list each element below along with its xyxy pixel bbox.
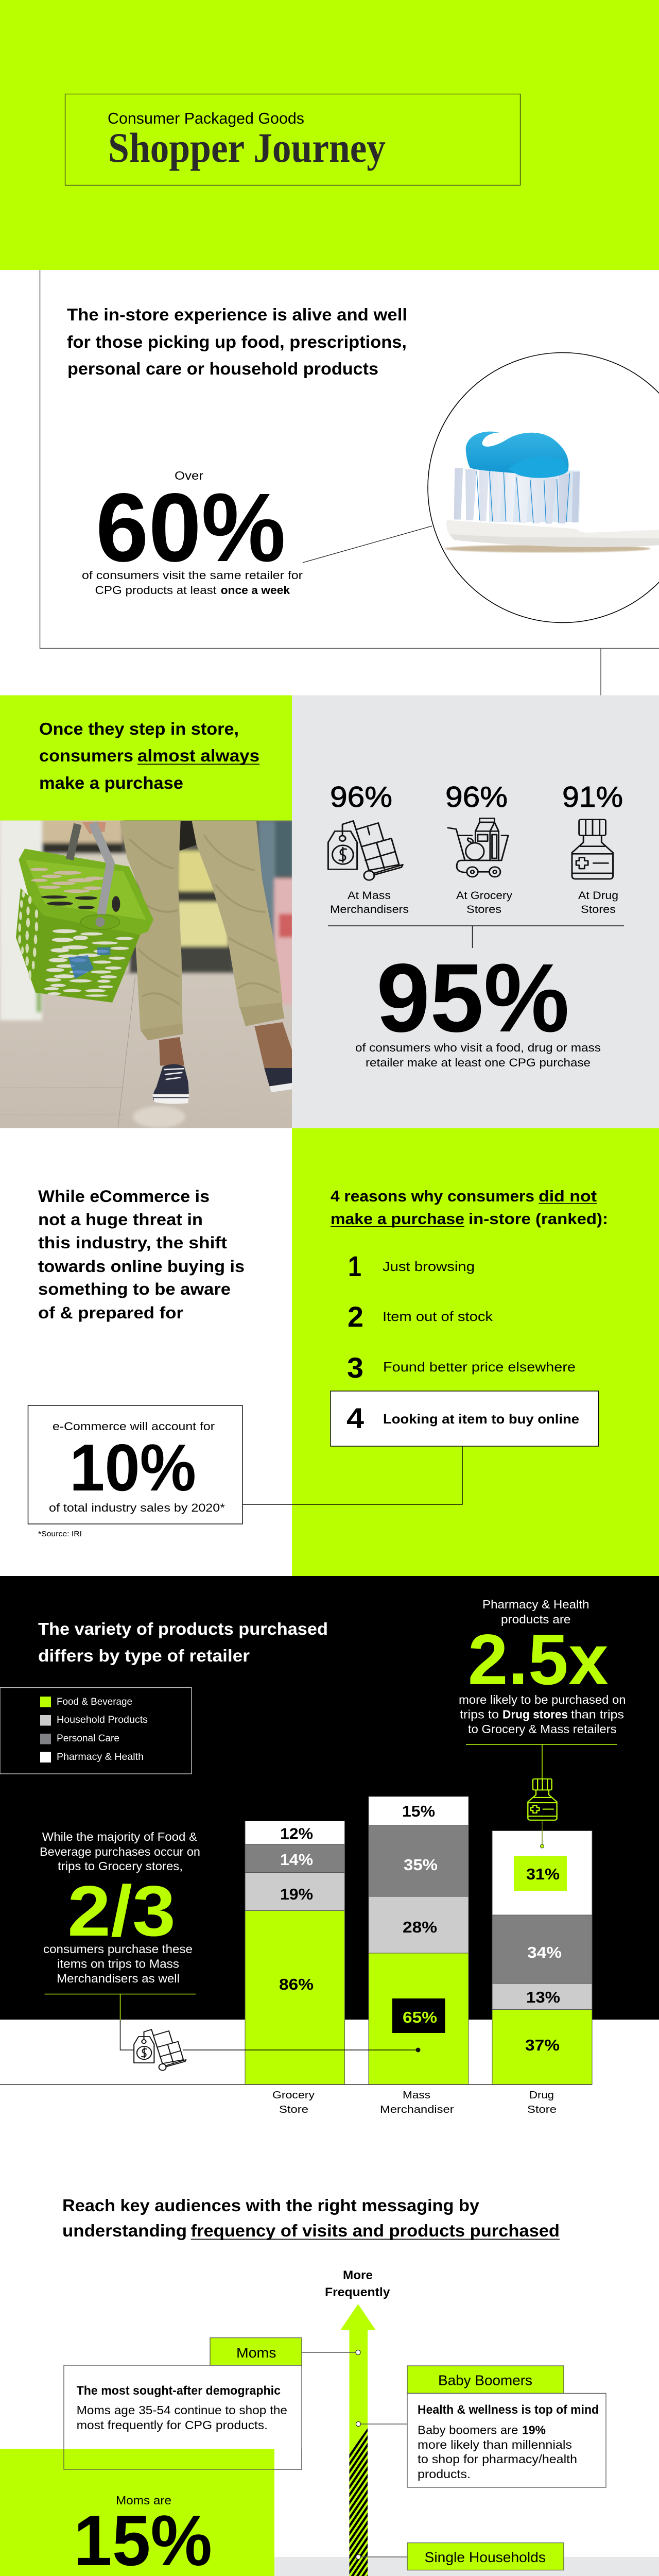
bar: mass merchandiser: [369, 1797, 469, 2084]
bar chart: purchases by retailer: [0, 1797, 592, 2115]
reason 4 highlighted: [331, 1391, 598, 1446]
axis labels: Store: [527, 2104, 557, 2115]
stat: two thirds: items on trips to Mass: [57, 1957, 179, 1970]
callout: 10 percent: e-Commerce will account for: [53, 1420, 215, 1433]
stat: mass merchandisers: Merchandisers: [330, 904, 409, 916]
axis labels: Grocery: [272, 2089, 315, 2101]
panel: title banner: [0, 0, 659, 270]
stat: mass merchandisers: [328, 781, 409, 916]
heading: variety of products: differs by type of retailer: [38, 1646, 250, 1665]
tag: baby boomers: Baby Boomers: [438, 2372, 532, 2388]
heading: in-store experience: personal care or household products: [67, 359, 378, 378]
reason 4 highlighted: 4: [346, 1402, 364, 1434]
arrow: frequency axis: [340, 2304, 376, 2576]
heading: ecommerce shift: not a huge threat in: [38, 1210, 203, 1229]
bar: grocery store: [245, 1821, 345, 2084]
stat: 2.5x: than trips: [571, 1707, 624, 1721]
stat: drug stores: [562, 781, 623, 916]
heading: four reasons: [331, 1187, 608, 1228]
panel: baby boomers description: Baby boomers are: [418, 2424, 518, 2437]
legend: Food & Beverage: [57, 1696, 132, 1707]
stat: 95 percent: retailer make at least one CPG purchase: [366, 1056, 591, 1069]
heading: ecommerce shift: towards online buying is: [38, 1257, 245, 1276]
tag: moms: [210, 2338, 360, 2365]
reason 2: Item out of stock: [383, 1309, 493, 1324]
ankles and shoes: [159, 1037, 184, 1065]
panel: basket photo heading: almost always: [137, 746, 259, 765]
panel: in-store experience: [40, 270, 659, 696]
stat: 2.5x: Drug stores: [502, 1707, 568, 1721]
panel: moms description: most frequently for CPG products.: [77, 2418, 268, 2432]
heading: in-store experience: The in-store experience is alive and well: [67, 305, 407, 324]
panel: baby boomers description: Health & wellness is top of mind: [418, 2403, 599, 2417]
axis label: more frequently: More: [343, 2268, 373, 2282]
reason 1: [348, 1250, 475, 1282]
drug values: [514, 1856, 567, 2054]
photo: shopper with basket: [0, 819, 293, 1128]
stat: grocery stores: 96%: [445, 781, 508, 814]
grocery values: 86%: [279, 1975, 314, 1993]
stat: mass merchandisers: 96%: [330, 781, 392, 814]
panel: baby boomers description: [407, 2393, 606, 2487]
panel: basket photo heading: Once they step in store,: [39, 719, 239, 738]
title box: Consumer Packaged Goods: [108, 109, 304, 127]
reason 3: 3: [347, 1351, 363, 1384]
basket body: [16, 888, 141, 1003]
panel: moms description: The most sought-after demographic: [77, 2384, 281, 2398]
heading: variety of products: The variety of products purchased: [38, 1619, 328, 1638]
stat: 95 percent: 95%: [376, 944, 569, 1053]
reason 3: Found better price elsewhere: [383, 1359, 576, 1375]
stat: 2.5x: [459, 1598, 626, 1736]
heading: reach key audiences: frequency of visits and products purchased: [191, 2221, 560, 2240]
legend: Pharmacy & Health: [57, 1751, 144, 1762]
heading: four reasons: make a purchase: [331, 1210, 464, 1228]
panel: moms 15 percent stat: Moms are: [116, 2494, 171, 2507]
panel: basket photo heading: [0, 696, 292, 820]
title box: [65, 94, 520, 185]
drug values: 34%: [527, 1943, 562, 1961]
reason 2: 2: [348, 1300, 363, 1333]
tag: moms: Moms: [236, 2345, 276, 2361]
stat: 2.5x: trips to: [460, 1707, 499, 1721]
title box: Shopper Journey: [108, 124, 386, 171]
reason 4 highlighted: Looking at item to buy online: [383, 1411, 579, 1427]
icon: grocery cart: [448, 818, 508, 877]
connector: reason 4 to stat: [242, 1446, 462, 1504]
heading: ecommerce shift: While eCommerce is: [38, 1187, 210, 1206]
grocery values: 12%: [280, 1825, 313, 1842]
axis labels: Store: [279, 2104, 308, 2115]
heading: ecommerce shift: something to be aware: [38, 1280, 231, 1298]
legend: Household Products: [57, 1714, 148, 1725]
stat: drug stores: 91%: [562, 781, 623, 814]
stat: 95 percent: [355, 944, 601, 1069]
icon: toothbrush in circle: [428, 352, 659, 622]
stat: 2.5x: Pharmacy & Health: [482, 1598, 589, 1611]
icon: small price tag and trolley: [134, 2029, 186, 2071]
heading: four reasons: in-store (ranked):: [469, 1210, 608, 1228]
stat: two thirds: Merchandisers as well: [57, 1972, 180, 1985]
drug values: 31%: [526, 1865, 560, 1883]
tag: single households: [356, 2543, 564, 2570]
mass values: 28%: [403, 1918, 437, 1936]
stat: 2.5x: products are: [501, 1613, 570, 1626]
stat: two thirds: Beverage purchases occur on: [40, 1845, 200, 1858]
axis labels: Merchandiser: [380, 2104, 454, 2115]
stat: grocery stores: [445, 781, 513, 916]
stat: 2.5x: 2.5x: [468, 1620, 609, 1700]
heading: ecommerce shift: this industry, the shift: [38, 1233, 227, 1252]
heading: ecommerce shift: [38, 1187, 245, 1322]
panel: purchase rates: [292, 696, 659, 1128]
panel: moms 15 percent stat: [0, 2449, 302, 2576]
tag: single households: Single Households: [424, 2549, 546, 2565]
panel: moms description: Moms age 35-54 continue to shop the: [77, 2403, 287, 2417]
connector: two thirds to mass bar: [120, 2020, 420, 2053]
panel: products by retailer: [0, 1576, 659, 2020]
stat: grocery stores: At Grocery: [456, 890, 513, 902]
tag: baby boomers: [356, 2366, 606, 2487]
mass values: [392, 1802, 445, 2033]
stat: 60 percent: of consumers visit the same retailer for: [82, 569, 303, 582]
callout: 10 percent: [28, 1405, 242, 1524]
axis label: more frequently: [325, 2268, 390, 2299]
stat: grocery stores: Stores: [466, 904, 501, 916]
panel: basket photo heading: consumers: [39, 746, 133, 765]
icon: small green bottle: [528, 1779, 557, 1848]
stat: mass merchandisers: At Mass: [348, 890, 391, 902]
reason 1: Just browsing: [383, 1259, 475, 1274]
callout: 10 percent: 10%: [70, 1431, 196, 1505]
stat: 60 percent: CPG products at least: [95, 584, 216, 597]
heading: in-store experience: [67, 305, 407, 378]
stat: 95 percent: of consumers who visit a food, drug or mass: [355, 1041, 601, 1054]
stat: two thirds: consumers purchase these: [43, 1942, 193, 1956]
stat: two thirds: While the majority of Food &: [42, 1830, 197, 1843]
panel: moms description: [64, 2365, 302, 2469]
bar: drug store: [492, 1831, 592, 2084]
axis labels: [272, 2089, 557, 2115]
panel: grey audience background: [274, 2557, 659, 2576]
heading: reach key audiences: Reach key audiences with the right messaging by: [62, 2196, 480, 2215]
drug values: 37%: [525, 2036, 560, 2054]
heading: four reasons: did not: [539, 1187, 597, 1205]
callout: 10 percent: of total industry sales by 2020*: [49, 1501, 225, 1514]
icon: price tag and trolley: [328, 821, 403, 880]
reason 2: [348, 1300, 493, 1333]
heading: variety of products: [38, 1619, 328, 1665]
heading: in-store experience: for those picking up food, prescriptions,: [67, 332, 407, 351]
mass values: 15%: [402, 1802, 435, 1820]
legend: Personal Care: [57, 1733, 119, 1744]
axis labels: Drug: [529, 2089, 554, 2101]
stat: 60 percent: 60%: [96, 473, 286, 582]
basket handles: [70, 824, 78, 859]
source note: *Source: IRI: [38, 1530, 82, 1538]
heading: four reasons: 4 reasons why consumers: [331, 1187, 534, 1205]
mass values: 65%: [403, 2008, 437, 2026]
panel: basket photo heading: make a purchase: [39, 773, 183, 792]
heading: reach key audiences: [62, 2196, 560, 2240]
stat: 2.5x: to Grocery & Mass retailers: [468, 1722, 617, 1736]
stat: 2.5x: more likely to be purchased on: [459, 1693, 626, 1706]
mass values: 35%: [404, 1856, 438, 1874]
grocery values: [279, 1825, 314, 1993]
stat: 60 percent: once a week: [221, 584, 290, 597]
drug values: 13%: [526, 1988, 560, 2006]
stat: 60 percent: Over: [175, 469, 203, 482]
reason 3: [347, 1351, 576, 1384]
heading: ecommerce shift: of & prepared for: [38, 1303, 183, 1322]
axis label: more frequently: Frequently: [325, 2285, 390, 2299]
legend: [0, 1688, 192, 1774]
panel: ecommerce: [28, 1128, 659, 1576]
heading: reach key audiences: understanding: [62, 2221, 187, 2240]
reason 1: 1: [348, 1250, 361, 1282]
stat: two thirds: trips to Grocery stores,: [58, 1859, 183, 1873]
stat: drug stores: Stores: [581, 904, 616, 916]
grocery values: 19%: [280, 1885, 313, 1903]
panel: baby boomers description: to shop for pharmacy/health: [418, 2452, 577, 2466]
panel: baby boomers description: products.: [418, 2467, 471, 2481]
stat: two thirds: [40, 1830, 200, 1985]
panel: baby boomers description: more likely than millennials: [418, 2438, 572, 2451]
panel: baby boomers description: 19%: [522, 2424, 546, 2437]
icon: medicine bottle: [572, 820, 613, 879]
stat: two thirds: 2/3: [67, 1871, 176, 1951]
connector line: [303, 526, 432, 563]
axis labels: Mass: [403, 2089, 430, 2101]
trousers: [120, 821, 182, 1030]
stat: drug stores: At Drug: [578, 890, 618, 902]
grocery values: 14%: [280, 1851, 313, 1869]
